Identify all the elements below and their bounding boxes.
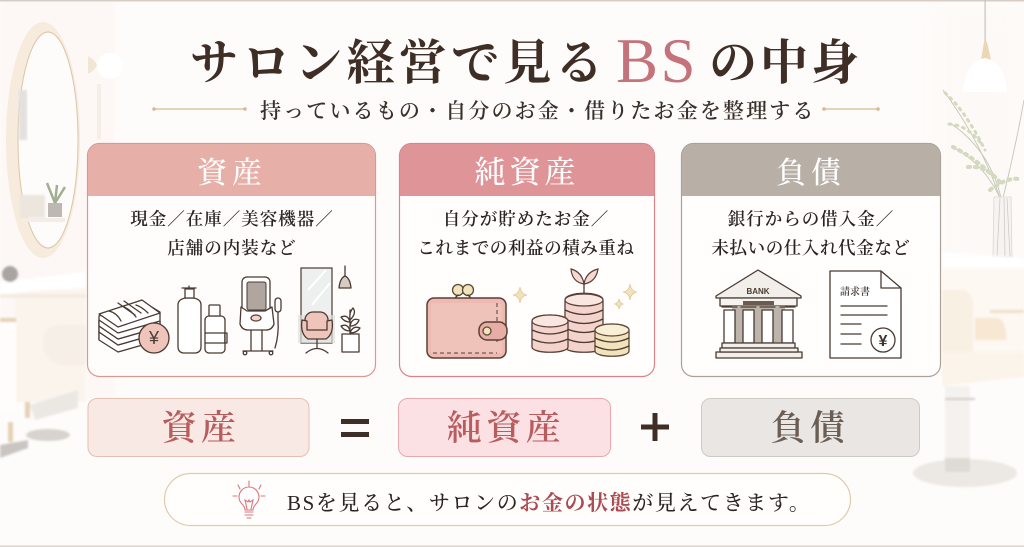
mirror <box>6 22 80 258</box>
liabilities description: 銀行からの借入金／ <box>728 209 894 229</box>
liabilities header: 負債 <box>776 157 846 190</box>
liabilities header <box>682 144 940 196</box>
title <box>190 26 862 96</box>
assets description: 現金／在庫／美容機器／ <box>130 209 334 229</box>
equation box: assets: 資産 <box>161 409 241 448</box>
title: BS <box>616 26 698 96</box>
right vase plant <box>943 90 1024 257</box>
icon: light bulb <box>233 481 265 518</box>
title: の中身 <box>709 37 862 90</box>
icon: invoice: 請求書 <box>840 285 870 298</box>
icon: cash stack with yen coin <box>99 300 169 353</box>
icon: cash stack with yen coin: ¥ <box>148 328 160 348</box>
equation box: liabilities: 負債 <box>770 409 850 448</box>
callout text: BSを見ると、サロンのお金の状態が見えてきます。 <box>287 491 811 515</box>
right pendant lamp <box>963 0 1007 92</box>
equation box: net assets <box>398 398 610 456</box>
title: サロン経営で見る <box>190 37 608 90</box>
wall lamp <box>88 53 123 139</box>
plus sign <box>641 413 669 441</box>
icon: salon chair, mirror and plant <box>298 266 360 353</box>
net assets description: 自分が貯めたお金／ <box>443 209 609 229</box>
icon: invoice <box>830 271 901 358</box>
liabilities description: 未払いの仕入れ代金など <box>711 238 911 258</box>
right counter and chair <box>913 252 1024 487</box>
panel: assets <box>88 144 376 376</box>
equation box: liabilities <box>702 398 920 456</box>
net assets description: これまでの利益の積み重ね <box>417 238 635 258</box>
equation box: net assets: 純資産 <box>447 409 565 448</box>
assets header: 資産 <box>197 157 267 190</box>
icon: coin stacks with sprout <box>532 269 629 356</box>
panel: liabilities <box>682 144 940 376</box>
icon: wallet <box>427 284 507 358</box>
icon: bank <box>716 270 802 358</box>
assets header <box>88 144 375 196</box>
icon: cosmetic bottles <box>178 286 227 353</box>
icon: invoice: ¥ <box>879 333 888 350</box>
net assets header <box>400 144 654 196</box>
subtitle with ornament lines: 持っているもの・自分のお金・借りたお金を整理する <box>260 99 816 123</box>
icon: sparkles <box>513 284 637 309</box>
icon: bank: BANK <box>746 287 770 296</box>
icon: beauty machine <box>240 277 281 355</box>
assets description: 店舗の内装など <box>167 238 297 258</box>
equals sign <box>341 419 369 437</box>
panel: net assets <box>400 144 654 376</box>
net assets header: 純資産 <box>474 155 580 190</box>
left counter and chair <box>0 266 86 458</box>
callout <box>164 474 850 526</box>
equation box: assets <box>88 398 309 456</box>
